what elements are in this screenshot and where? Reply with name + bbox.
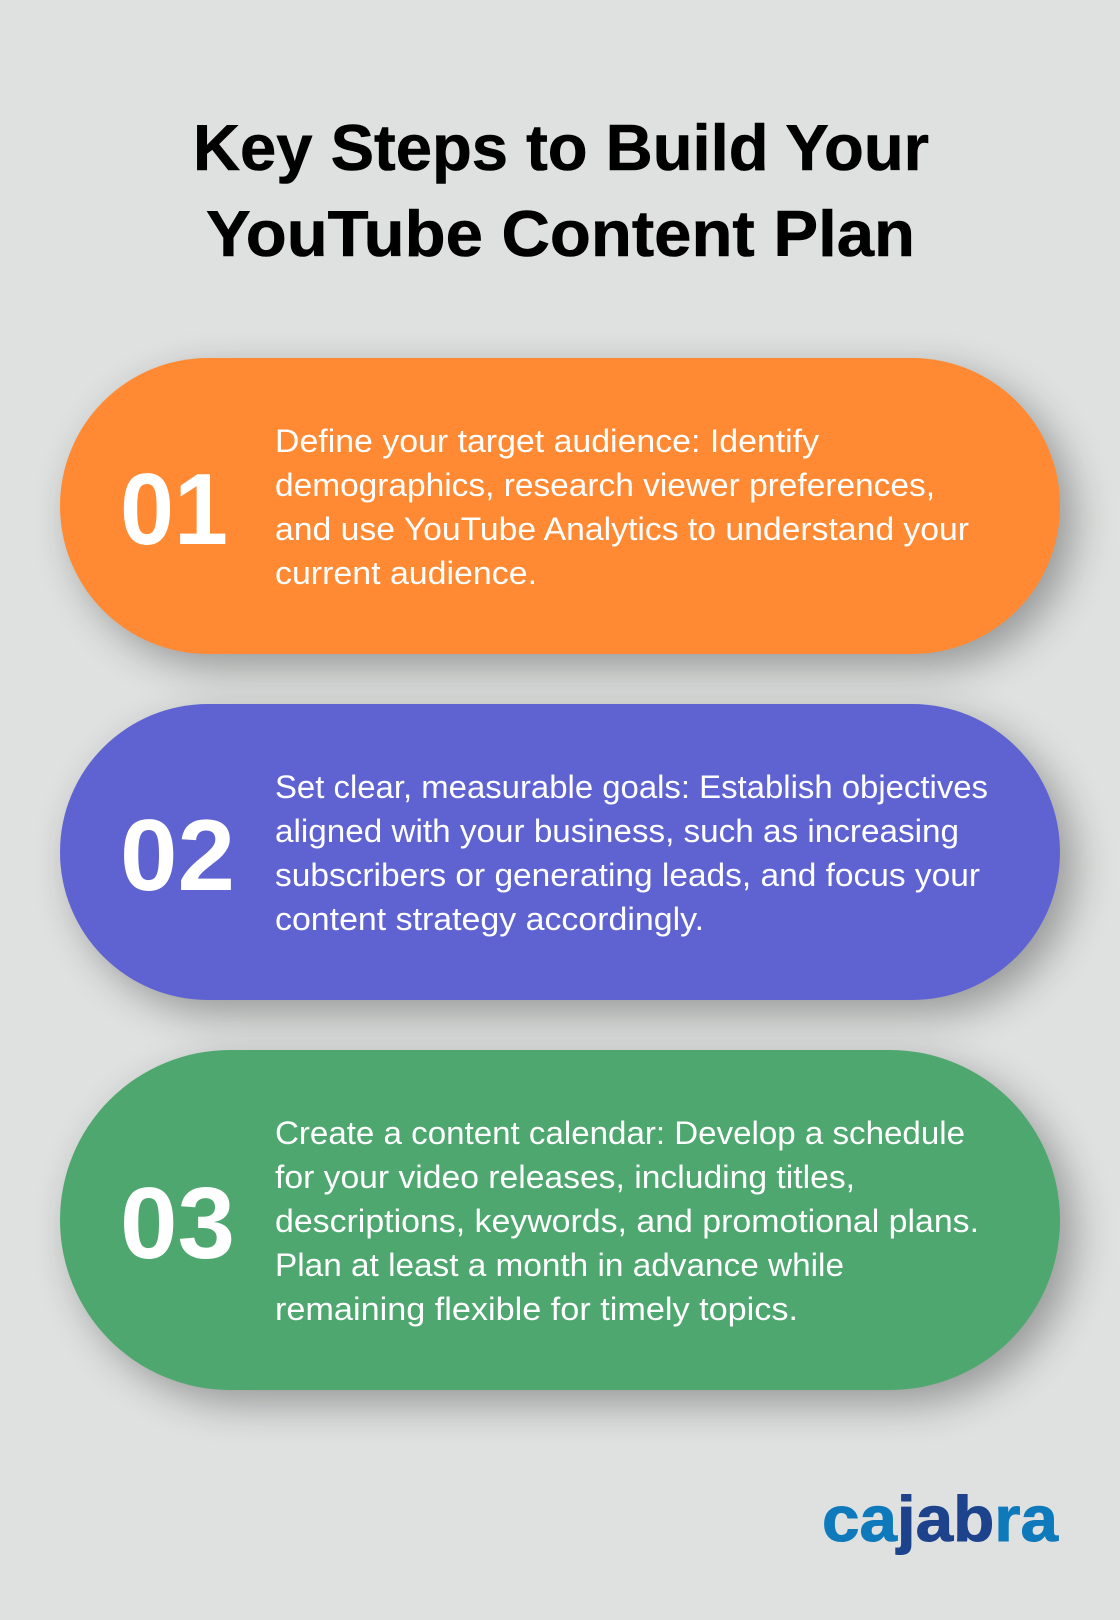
number 02: 02 — [120, 800, 235, 912]
title — [193, 111, 929, 270]
logo: cajabra: cajabra — [822, 1483, 1058, 1555]
text: step 01 description: Define your target audience: Identify — [275, 423, 819, 459]
panel: step 03 — [60, 1050, 1060, 1390]
text: step 02 description: subscribers or generating leads, and focus your — [275, 857, 980, 893]
panel: step 02 — [60, 704, 1060, 1000]
text: step 01 description — [275, 423, 969, 591]
text: step 01 description: demographics, research viewer preferences, — [275, 467, 935, 503]
title: Key Steps to Build Your — [193, 111, 929, 184]
text: step 01 description: current audience. — [275, 555, 537, 591]
text: step 02 description: aligned with your business, such as increasing — [275, 813, 959, 849]
text: step 03 description: for your video releases, including titles, — [275, 1159, 855, 1195]
text: step 02 description: content strategy accordingly. — [275, 901, 704, 937]
text: step 03 description: Plan at least a month in advance while — [275, 1247, 844, 1283]
title: YouTube Content Plan — [206, 197, 915, 270]
text: step 03 description: remaining flexible for timely topics. — [275, 1291, 798, 1327]
number 03: 03 — [120, 1168, 235, 1280]
number 01: 01 — [120, 454, 228, 566]
text: step 01 description: and use YouTube Analytics to understand your — [275, 511, 969, 547]
text: step 03 description: descriptions, keywords, and promotional plans. — [275, 1203, 979, 1239]
text: step 02 description: Set clear, measurable goals: Establish objectives — [275, 769, 988, 805]
text: step 03 description: Create a content calendar: Develop a schedule — [275, 1115, 965, 1151]
text: step 02 description — [275, 769, 988, 937]
text: step 03 description — [275, 1115, 979, 1327]
panel: step 01 — [60, 358, 1060, 654]
